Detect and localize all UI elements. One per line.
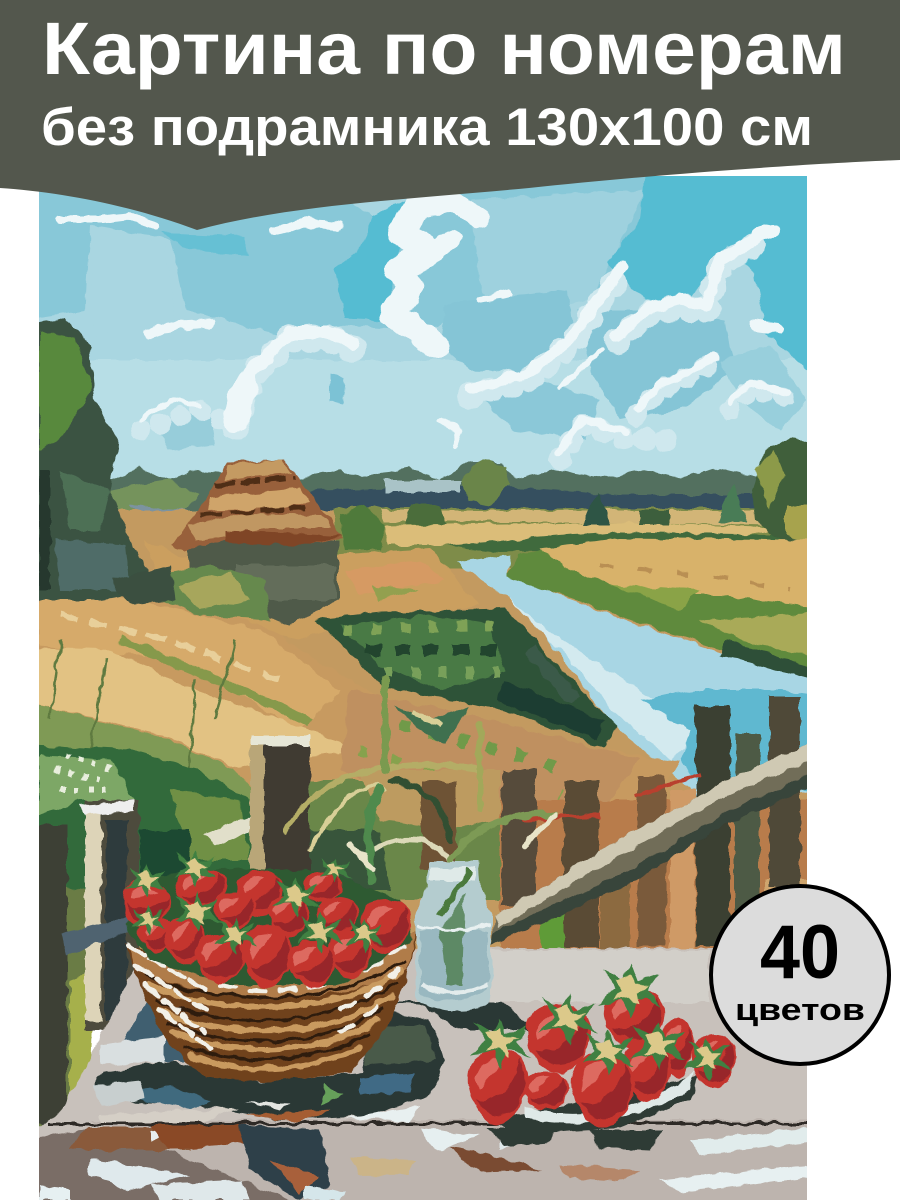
- central bushes: [313, 609, 617, 748]
- basket shadow: [95, 1000, 540, 1122]
- clouds: pale puffs: [140, 239, 789, 459]
- tree: left: [39, 318, 149, 602]
- plate of strawberries: [468, 964, 736, 1150]
- shrubs beside hut: [110, 505, 385, 620]
- distant treeline: [110, 459, 756, 512]
- meadow behind hut: [337, 548, 450, 602]
- tree: right: [752, 437, 807, 542]
- meadow: tall grass and path: [39, 597, 680, 802]
- header banner: [0, 0, 900, 230]
- clouds: white ridges: [59, 203, 789, 453]
- base land: [118, 508, 807, 950]
- badge: 40 colours: 40: [760, 910, 840, 995]
- thatched hut: [172, 460, 343, 625]
- badge: 40 colours: цветов: [735, 992, 865, 1027]
- foreground greenery: [19, 745, 260, 1130]
- strawberries in basket: [113, 850, 412, 988]
- river: [455, 555, 829, 800]
- subtitle: без подрамника 130х100 см: [41, 98, 813, 157]
- wicker basket: [125, 930, 418, 1082]
- painting: countryside with strawberries: [19, 160, 830, 1200]
- wooden fence planks: [310, 696, 829, 950]
- fence posts left: [19, 736, 310, 1125]
- badge: 40 colours: [711, 886, 889, 1064]
- far fields: [335, 485, 829, 568]
- sky: [39, 176, 807, 480]
- glass jar: [416, 862, 492, 1010]
- diagonal handrail: [492, 735, 829, 945]
- right field and bank: [506, 537, 807, 678]
- title: Картина по номерам: [42, 7, 846, 90]
- plant stems: [285, 680, 555, 900]
- wooden table: [19, 948, 830, 1200]
